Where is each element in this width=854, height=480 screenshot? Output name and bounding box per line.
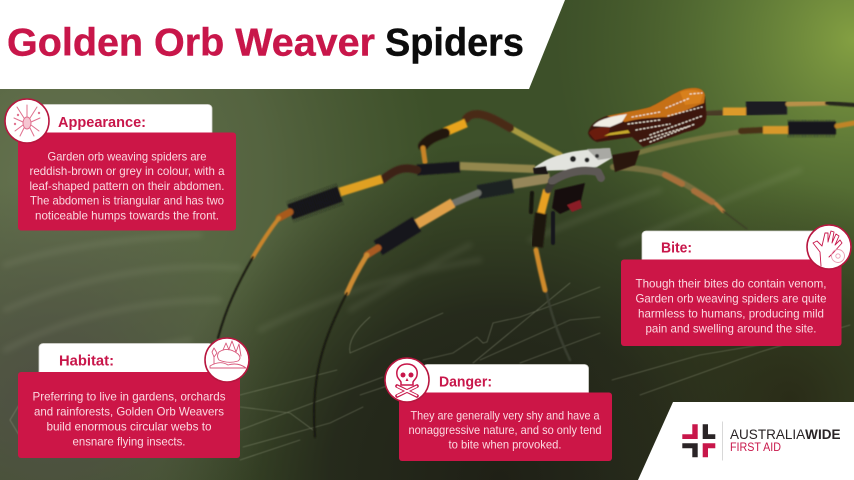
spider leg: front hanging <box>536 172 575 360</box>
text: appearance description: Garden orb weaving spiders are <box>48 150 207 164</box>
title: Spiders <box>385 22 524 64</box>
text: danger description: They are generally very shy and have a <box>410 409 600 423</box>
text: habitat description: build enormous circular webs to <box>46 419 212 433</box>
spider leg: long left rear <box>218 166 535 338</box>
spider leg: far right lower <box>630 123 854 155</box>
text: appearance description: The abdomen is triangular and has two <box>30 194 224 208</box>
title banner <box>0 0 565 89</box>
text: appearance description: noticeable humps towards the front. <box>35 208 219 222</box>
panel: danger <box>385 358 612 461</box>
text: danger description <box>408 409 602 451</box>
title <box>7 22 524 64</box>
text: bite description: pain and swelling around the site. <box>646 322 816 336</box>
heading: habitat: Habitat: <box>59 353 114 370</box>
spider mouth parts <box>531 183 585 243</box>
logo text: First Aid: FIRST AID <box>730 442 781 454</box>
text: bite description <box>636 277 827 336</box>
heading: bite: Bite: <box>661 240 692 257</box>
logo mark: cross <box>682 424 715 457</box>
text: habitat description: Preferring to live in gardens, orchards <box>32 389 226 403</box>
spider leg: right front <box>613 167 747 229</box>
panel: appearance <box>5 99 236 230</box>
icon: habitat landscape <box>205 338 249 382</box>
icon: spider <box>5 99 49 143</box>
heading: danger: Danger: <box>439 374 492 391</box>
spider leg: upper left <box>423 114 560 162</box>
text: danger description: to bite when provoked. <box>448 437 562 451</box>
panel: bite <box>621 225 851 346</box>
spider abdomen <box>588 88 706 147</box>
text: bite description: harmless to humans, producing mild <box>638 307 824 321</box>
panel: habitat <box>18 338 249 458</box>
icon: hand with bite <box>807 225 851 269</box>
web strands <box>5 170 850 460</box>
text: appearance description: leaf-shaped pattern on their abdomen. <box>30 179 224 193</box>
text: habitat description <box>32 389 226 448</box>
title: Golden Orb Weaver <box>7 22 375 64</box>
spider leg: far right upper <box>705 103 854 114</box>
text: bite description: Though their bites do contain venom, <box>636 277 826 291</box>
text: bite description: Garden orb weaving spiders are quite <box>636 292 827 306</box>
spider leg: long left middle <box>314 178 550 437</box>
text: habitat description: ensnare flying insects. <box>72 434 186 448</box>
logo panel <box>638 402 854 480</box>
icon: skull and crossbones <box>385 358 429 402</box>
spider cephalothorax <box>533 148 640 181</box>
text: appearance description: reddish-brown or grey in colour, with a <box>30 164 225 178</box>
text: danger description: nonaggressive nature, and so only tend <box>408 423 602 437</box>
heading: appearance: Appearance: <box>58 114 146 131</box>
logo text: Australia Wide: AUSTRALIAWIDE <box>730 427 840 442</box>
text: appearance description <box>30 150 225 222</box>
spider <box>218 88 854 437</box>
text: habitat description: and rainforests, Golden Orb Weavers <box>34 404 224 418</box>
